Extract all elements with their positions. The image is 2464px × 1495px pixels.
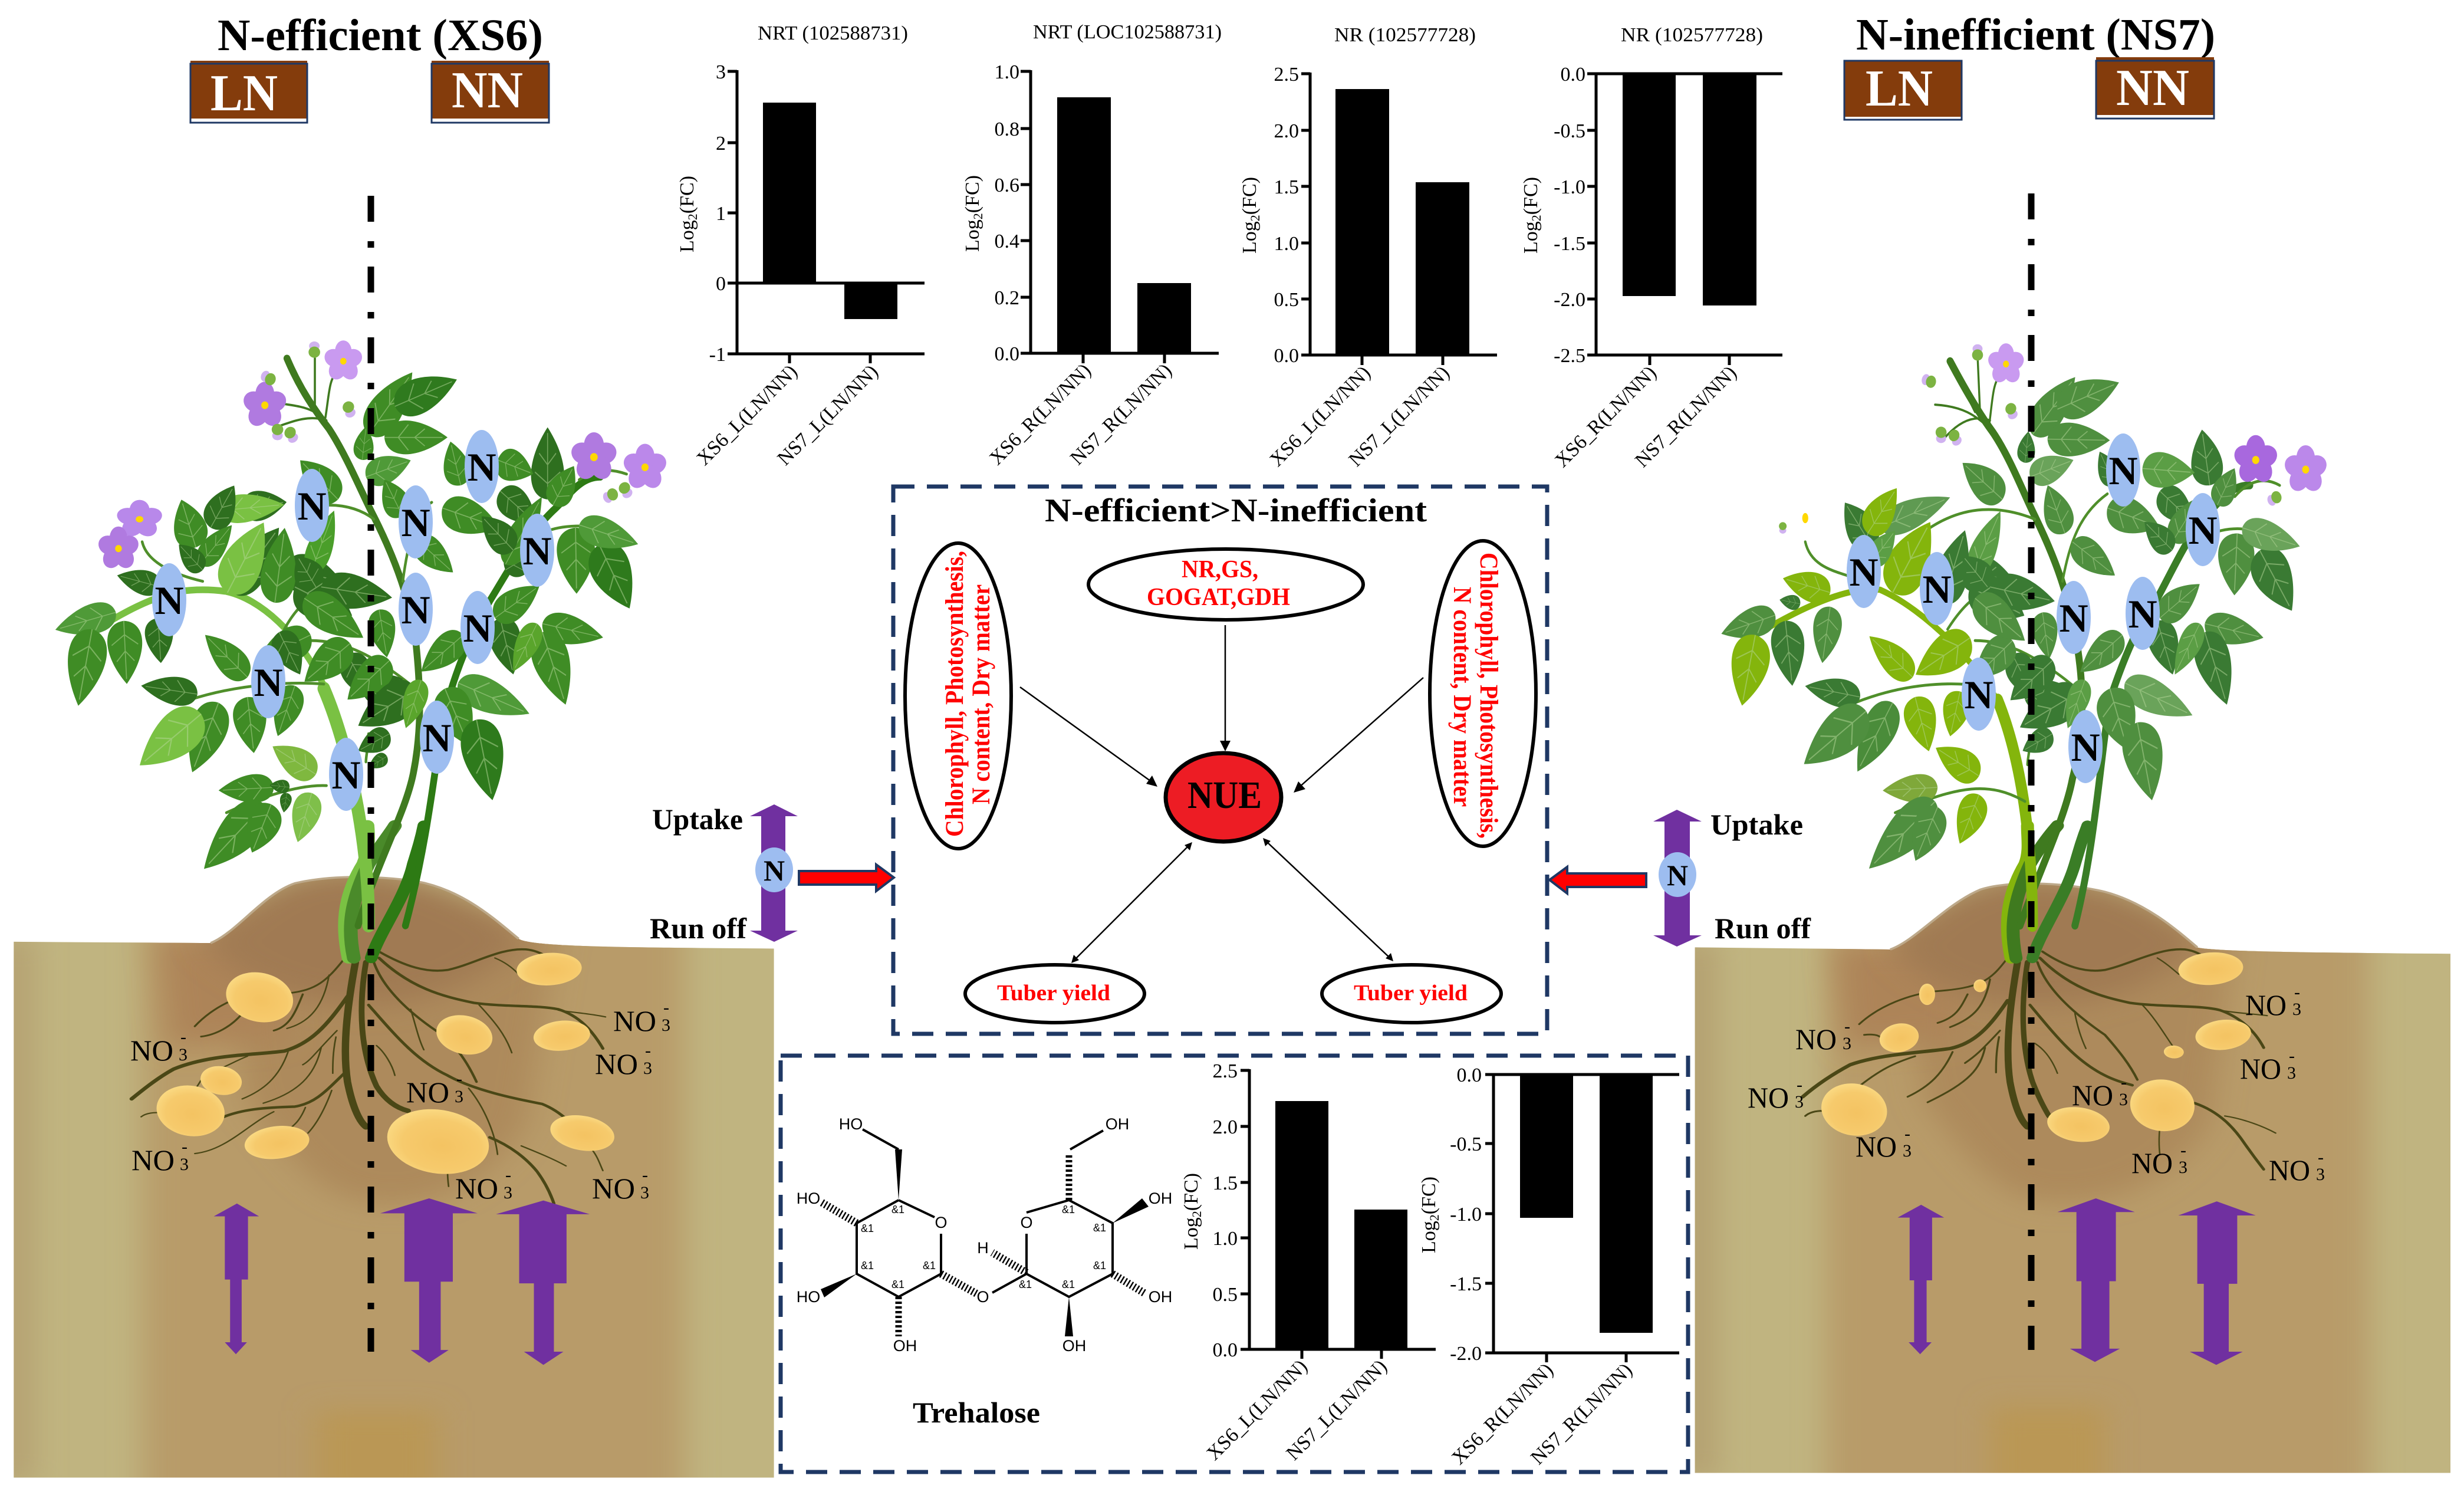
chart: trehalose root: NS7_R(LN/NN)	[1527, 1359, 1637, 1469]
chart: NR 102577728 root: -2.0	[1554, 289, 1585, 311]
chart: trehalose leaf: 2.5	[1212, 1060, 1238, 1082]
chart: NRT 102588731 leaf: Log	[676, 220, 698, 252]
NO3 labels right: NO	[2072, 1079, 2113, 1112]
molecule: trehalose structure: &1	[1062, 1279, 1075, 1290]
potato tubers	[146, 951, 619, 1183]
uptake and run off right: Uptake	[1710, 808, 1803, 841]
chart: trehalose root: 2	[1427, 1214, 1442, 1221]
molecule: trehalose structure: HO	[797, 1288, 820, 1306]
chart: NRT LOC102588731 root: 1.0	[994, 61, 1019, 83]
NO3 labels left: -	[642, 1165, 648, 1185]
title: N-efficient: N-efficient (XS6)	[218, 11, 543, 60]
NO3 labels right: NO	[2269, 1154, 2310, 1187]
molecule: trehalose structure: OH	[1149, 1190, 1172, 1207]
NO3 labels left: NO	[595, 1047, 638, 1080]
flowers right plant	[1779, 343, 2329, 534]
molecule: trehalose structure: &1	[861, 1260, 874, 1271]
arrows: nitrogen movement in soil	[214, 1198, 590, 1365]
N markers right plant: N	[2188, 508, 2218, 553]
chart: trehalose root: -1.0	[1450, 1204, 1482, 1225]
label: NN right: NN	[2116, 60, 2189, 117]
label: LN right	[1844, 60, 1962, 120]
oval: left traits	[905, 543, 1011, 849]
chart: NRT 102588731 leaf	[676, 22, 925, 470]
NO3 labels right: -	[1844, 1017, 1850, 1036]
NO3 labels left: NO	[455, 1172, 498, 1205]
NO3 labels left: 3	[180, 1155, 189, 1174]
NO3 labels left: 3	[643, 1059, 652, 1078]
chart: NR 102577728 leaf: 0.5	[1274, 289, 1299, 311]
N markers right plant: N	[1922, 567, 1952, 612]
oval: tuber yield right	[1322, 965, 1501, 1023]
chart: NRT LOC102588731 root: 0.2	[994, 287, 1019, 309]
N markers right plant: N	[2071, 725, 2100, 770]
node: NUE	[1166, 753, 1281, 842]
label: trehalose: Trehalose	[913, 1396, 1040, 1429]
molecule: trehalose structure: &1	[923, 1260, 936, 1271]
NO3 labels left: NO	[406, 1076, 449, 1109]
NO3 labels right: -	[2180, 1141, 2186, 1160]
oval: left traits: N content, Dry matter	[968, 584, 995, 804]
chart: trehalose root: -2.0	[1450, 1343, 1482, 1365]
chart: NRT LOC102588731 root: 0.0	[994, 343, 1019, 365]
chart: trehalose leaf: 0.0	[1212, 1339, 1238, 1361]
uptake and run off left: N	[764, 854, 785, 887]
chart: NRT LOC102588731 root: NS7_R(LN/NN)	[1066, 359, 1176, 469]
molecule: trehalose structure: OH	[893, 1337, 917, 1355]
molecule: trehalose structure: OH	[1062, 1337, 1086, 1355]
N markers right plant	[1847, 433, 2220, 783]
chart: NR 102577728 root: NR (102577728)	[1621, 24, 1763, 46]
arrows: nitrogen movement in soil	[1897, 1198, 2256, 1365]
molecule: trehalose structure: &1	[1093, 1222, 1106, 1234]
N markers left plant: N	[331, 753, 361, 797]
chart: trehalose root	[1418, 1064, 1679, 1469]
chart: NR 102577728 leaf: 1.5	[1274, 176, 1299, 198]
oval: enzymes: GOGAT,GDH	[1147, 584, 1290, 611]
NO3 labels left: 3	[662, 1016, 670, 1035]
NO3 labels left: -	[180, 1027, 186, 1047]
NO3 labels left: -	[645, 1041, 651, 1060]
stems at soil	[345, 826, 424, 958]
N markers left plant	[152, 430, 554, 811]
NO3 labels left: NO	[130, 1034, 173, 1067]
chart: trehalose leaf: Log	[1180, 1217, 1202, 1250]
chart: NRT LOC102588731 root: Log	[962, 219, 983, 252]
oval: right traits: Chlorophyll, Photosynthesis,	[1475, 553, 1502, 839]
chart: NRT LOC102588731 root: 2	[971, 213, 985, 219]
chart: NR 102577728 leaf: NS7_L(LN/NN)	[1345, 362, 1454, 471]
NO3 labels left: 3	[455, 1087, 463, 1106]
chart: NRT 102588731 leaf: (FC)	[676, 176, 698, 213]
chart: NR 102577728 root: -1.5	[1554, 233, 1585, 255]
stems at soil	[2008, 826, 2087, 958]
chart: NR 102577728 root: (FC)	[1520, 177, 1542, 215]
chart: trehalose leaf: 0.5	[1212, 1284, 1238, 1306]
NO3 labels left: -	[505, 1165, 511, 1185]
molecule: trehalose structure: O	[976, 1288, 989, 1306]
NO3 labels right: -	[2289, 1046, 2295, 1066]
molecule: trehalose structure: &1	[1019, 1279, 1032, 1290]
NO3 labels left: NO	[613, 1004, 656, 1037]
chart: NR 102577728 leaf: 1.0	[1274, 233, 1299, 255]
panel: trehalose	[781, 1056, 1688, 1472]
chart: trehalose leaf: 2.0	[1212, 1116, 1238, 1138]
N markers right plant: N	[2108, 448, 2138, 493]
roots	[131, 949, 606, 1204]
chart: NRT 102588731 leaf: NRT (102588731)	[758, 22, 908, 44]
chart: NRT LOC102588731 root: 0.4	[994, 231, 1019, 252]
uptake and run off right: N	[1667, 859, 1688, 892]
NO3 labels left: -	[456, 1069, 462, 1089]
NO3 labels right: 3	[1843, 1034, 1851, 1053]
chart: NR 102577728 leaf: XS6_L(LN/NN)	[1266, 362, 1375, 471]
molecule: trehalose structure: O	[1020, 1214, 1033, 1231]
oval: right traits: N content, Dry matter	[1448, 587, 1476, 807]
leaves right plant	[1718, 366, 2308, 884]
oval: tuber yield right: Tuber yield	[1354, 981, 1468, 1006]
NO3 labels right: 3	[2287, 1063, 2296, 1083]
NO3 labels right: NO	[2240, 1052, 2281, 1085]
panel: NUE diagram	[893, 487, 1547, 1034]
node: NUE: NUE	[1187, 774, 1262, 817]
N markers right plant: N	[2059, 596, 2088, 640]
chart: NR 102577728 leaf: Log	[1239, 221, 1261, 254]
chart: trehalose leaf: XS6_L(LN/NN)	[1203, 1355, 1312, 1465]
NO3 labels right: NO	[2131, 1146, 2173, 1179]
NO3 labels left: 3	[179, 1045, 187, 1064]
chart: NRT LOC102588731 root	[962, 21, 1222, 469]
NO3 labels right: 3	[1903, 1141, 1912, 1161]
NO3 labels left: 3	[640, 1183, 649, 1202]
uptake and run off right	[1550, 808, 1811, 947]
chart: trehalose leaf: (FC)	[1180, 1173, 1202, 1211]
panel: right plant foliage	[1718, 343, 2329, 925]
chart: NRT 102588731 leaf: 2	[716, 133, 726, 155]
chart: NRT LOC102588731 root: (FC)	[962, 175, 983, 213]
oval: tuber yield left: Tuber yield	[997, 981, 1110, 1006]
NO3 labels right: NO	[1795, 1023, 1837, 1056]
uptake and run off left	[650, 803, 894, 945]
panel: left plant foliage	[52, 340, 669, 925]
chart: NRT LOC102588731 root: NRT (LOC102588731)	[1033, 21, 1222, 43]
title: N-inefficient: N-inefficient (NS7)	[1856, 10, 2215, 60]
molecule: trehalose structure: &1	[861, 1223, 874, 1234]
chart: trehalose root: (FC)	[1418, 1177, 1440, 1214]
panel: left soil and roots	[0, 826, 790, 1495]
chart: trehalose root: Log	[1418, 1221, 1440, 1253]
uptake and run off left: Uptake	[652, 803, 743, 836]
N markers left plant: N	[522, 528, 552, 573]
molecule: trehalose structure: &1	[891, 1279, 904, 1290]
NO3 labels right: 3	[2316, 1165, 2325, 1184]
chart: NRT 102588731 leaf: 3	[716, 61, 726, 83]
NO3 labels right: -	[1797, 1075, 1802, 1095]
NO3 labels right: -	[1904, 1124, 1910, 1144]
chart: NR 102577728 root	[1520, 24, 1782, 472]
NO3 labels left	[130, 998, 670, 1205]
NO3 labels left: 3	[504, 1183, 512, 1202]
label: LN left: LN	[210, 65, 278, 122]
chart: NR 102577728 leaf: (FC)	[1239, 177, 1261, 215]
N markers left plant: N	[401, 587, 430, 632]
molecule: trehalose structure: O	[935, 1214, 948, 1231]
NO3 labels right: NO	[1748, 1081, 1789, 1114]
chart: NRT 102588731 leaf: 1	[716, 203, 726, 225]
chart: trehalose root: XS6_R(LN/NN)	[1448, 1359, 1558, 1469]
oval: enzymes	[1088, 549, 1363, 620]
uptake and run off right: Run off	[1715, 912, 1811, 945]
chart: NR 102577728 root: Log	[1520, 221, 1542, 254]
NO3 labels right: -	[2318, 1148, 2324, 1167]
label: NN left: NN	[452, 62, 523, 119]
label: LN right: LN	[1866, 60, 1933, 117]
chart: NR 102577728 root: 0.0	[1560, 64, 1585, 86]
chart: NRT 102588731 leaf: XS6_L(LN/NN)	[693, 360, 802, 470]
oval: right traits	[1430, 541, 1536, 846]
chart: NR 102577728 root: NS7_R(LN/NN)	[1631, 362, 1741, 472]
divider: right LN vs NN	[2028, 193, 2034, 1350]
NO3 labels right: NO	[2245, 988, 2287, 1021]
chart: NR 102577728 root: -2.5	[1554, 345, 1585, 367]
molecule: trehalose structure: OH	[1149, 1288, 1172, 1306]
molecule: trehalose structure: H	[977, 1239, 989, 1257]
N markers left plant: N	[467, 445, 496, 489]
molecule: trehalose structure: &1	[1093, 1260, 1106, 1271]
molecule: trehalose structure: HO	[839, 1115, 863, 1133]
chart: NRT 102588731 leaf: NS7_L(LN/NN)	[774, 360, 883, 470]
chart: NRT 102588731 leaf: -1	[709, 344, 726, 366]
chart: trehalose leaf	[1180, 1060, 1436, 1465]
label: NN left	[432, 61, 549, 123]
NO3 labels left: NO	[131, 1144, 175, 1177]
NO3 labels left: NO	[592, 1172, 635, 1205]
panel: right soil and roots	[1680, 826, 2464, 1495]
heading: comparison: N-efficient>N-inefficient	[1045, 492, 1427, 529]
chart: NR 102577728 root: 2	[1529, 215, 1544, 221]
N markers left plant: N	[463, 606, 492, 650]
N markers left plant: N	[401, 500, 430, 545]
chart: trehalose leaf: 2	[1189, 1211, 1204, 1217]
N markers right plant: N	[2128, 592, 2157, 636]
label: LN left	[190, 61, 307, 123]
NO3 labels right: 3	[2119, 1090, 2128, 1109]
NO3 labels left: -	[182, 1137, 187, 1156]
chart: NR 102577728 leaf: 2	[1248, 215, 1262, 221]
chart: NR 102577728 root: XS6_R(LN/NN)	[1551, 362, 1661, 472]
chart: NRT 102588731 leaf: 0	[716, 273, 726, 295]
NO3 labels right: 3	[1795, 1092, 1804, 1112]
NO3 labels right: -	[2121, 1073, 2127, 1092]
flowers left plant	[96, 340, 669, 572]
uptake and run off left: Run off	[650, 912, 747, 945]
molecule: trehalose structure: &1	[891, 1204, 904, 1215]
chart: trehalose root: -1.5	[1450, 1273, 1482, 1295]
chart: NRT 102588731 leaf: 2	[685, 213, 700, 220]
N markers left plant: N	[297, 484, 327, 528]
NO3 labels right: 3	[2292, 1000, 2301, 1019]
NO3 labels right: -	[2294, 983, 2300, 1002]
N markers left plant: N	[254, 660, 283, 705]
potato tubers	[1811, 950, 2254, 1146]
chart: trehalose root: 0.0	[1456, 1064, 1482, 1086]
label: NN right	[2096, 57, 2214, 119]
molecule: trehalose structure: OH	[1106, 1115, 1129, 1133]
chart: NR 102577728 leaf	[1239, 24, 1497, 471]
NO3 labels right	[1748, 983, 2325, 1187]
N markers right plant: N	[1964, 672, 1993, 717]
stems right plant	[1770, 356, 2279, 925]
oval: left traits: Chlorophyll, Photosynthesis,	[941, 551, 969, 837]
N markers right plant: N	[1849, 550, 1879, 594]
stems left plant	[79, 359, 627, 925]
molecule: trehalose structure: HO	[797, 1190, 820, 1207]
oval: tuber yield left	[965, 965, 1144, 1023]
N markers left plant: N	[154, 578, 184, 623]
leaves left plant	[52, 362, 647, 883]
chart: NRT LOC102588731 root: XS6_R(LN/NN)	[985, 359, 1096, 469]
chart: NRT LOC102588731 root: 0.8	[994, 119, 1019, 140]
chart: trehalose leaf: 1.5	[1212, 1172, 1238, 1194]
oval: enzymes: NR,GS,	[1182, 556, 1258, 583]
chart: NR 102577728 leaf: NR (102577728)	[1334, 24, 1476, 46]
N markers left plant: N	[422, 715, 452, 760]
NO3 labels right: NO	[1856, 1130, 1897, 1163]
chart: trehalose leaf: 1.0	[1212, 1228, 1238, 1250]
chart: NR 102577728 leaf: 0.0	[1274, 345, 1299, 367]
chart: NRT LOC102588731 root: 0.6	[994, 175, 1019, 196]
chart: trehalose leaf: NS7_L(LN/NN)	[1282, 1355, 1391, 1465]
molecule: trehalose structure	[797, 1115, 1172, 1355]
divider: left LN vs NN	[368, 196, 374, 1352]
chart: NR 102577728 root: -0.5	[1554, 120, 1585, 142]
NO3 labels right: 3	[2179, 1158, 2187, 1177]
roots	[1803, 949, 2276, 1169]
chart: NR 102577728 root: -1.0	[1554, 176, 1585, 198]
arrows into NUE	[1020, 625, 1423, 963]
molecule: trehalose structure: &1	[1062, 1204, 1075, 1215]
NO3 labels left: -	[663, 998, 669, 1017]
chart: trehalose root: -0.5	[1450, 1133, 1482, 1155]
chart: NR 102577728 leaf: 2.0	[1274, 120, 1299, 142]
chart: NR 102577728 leaf: 2.5	[1274, 64, 1299, 86]
